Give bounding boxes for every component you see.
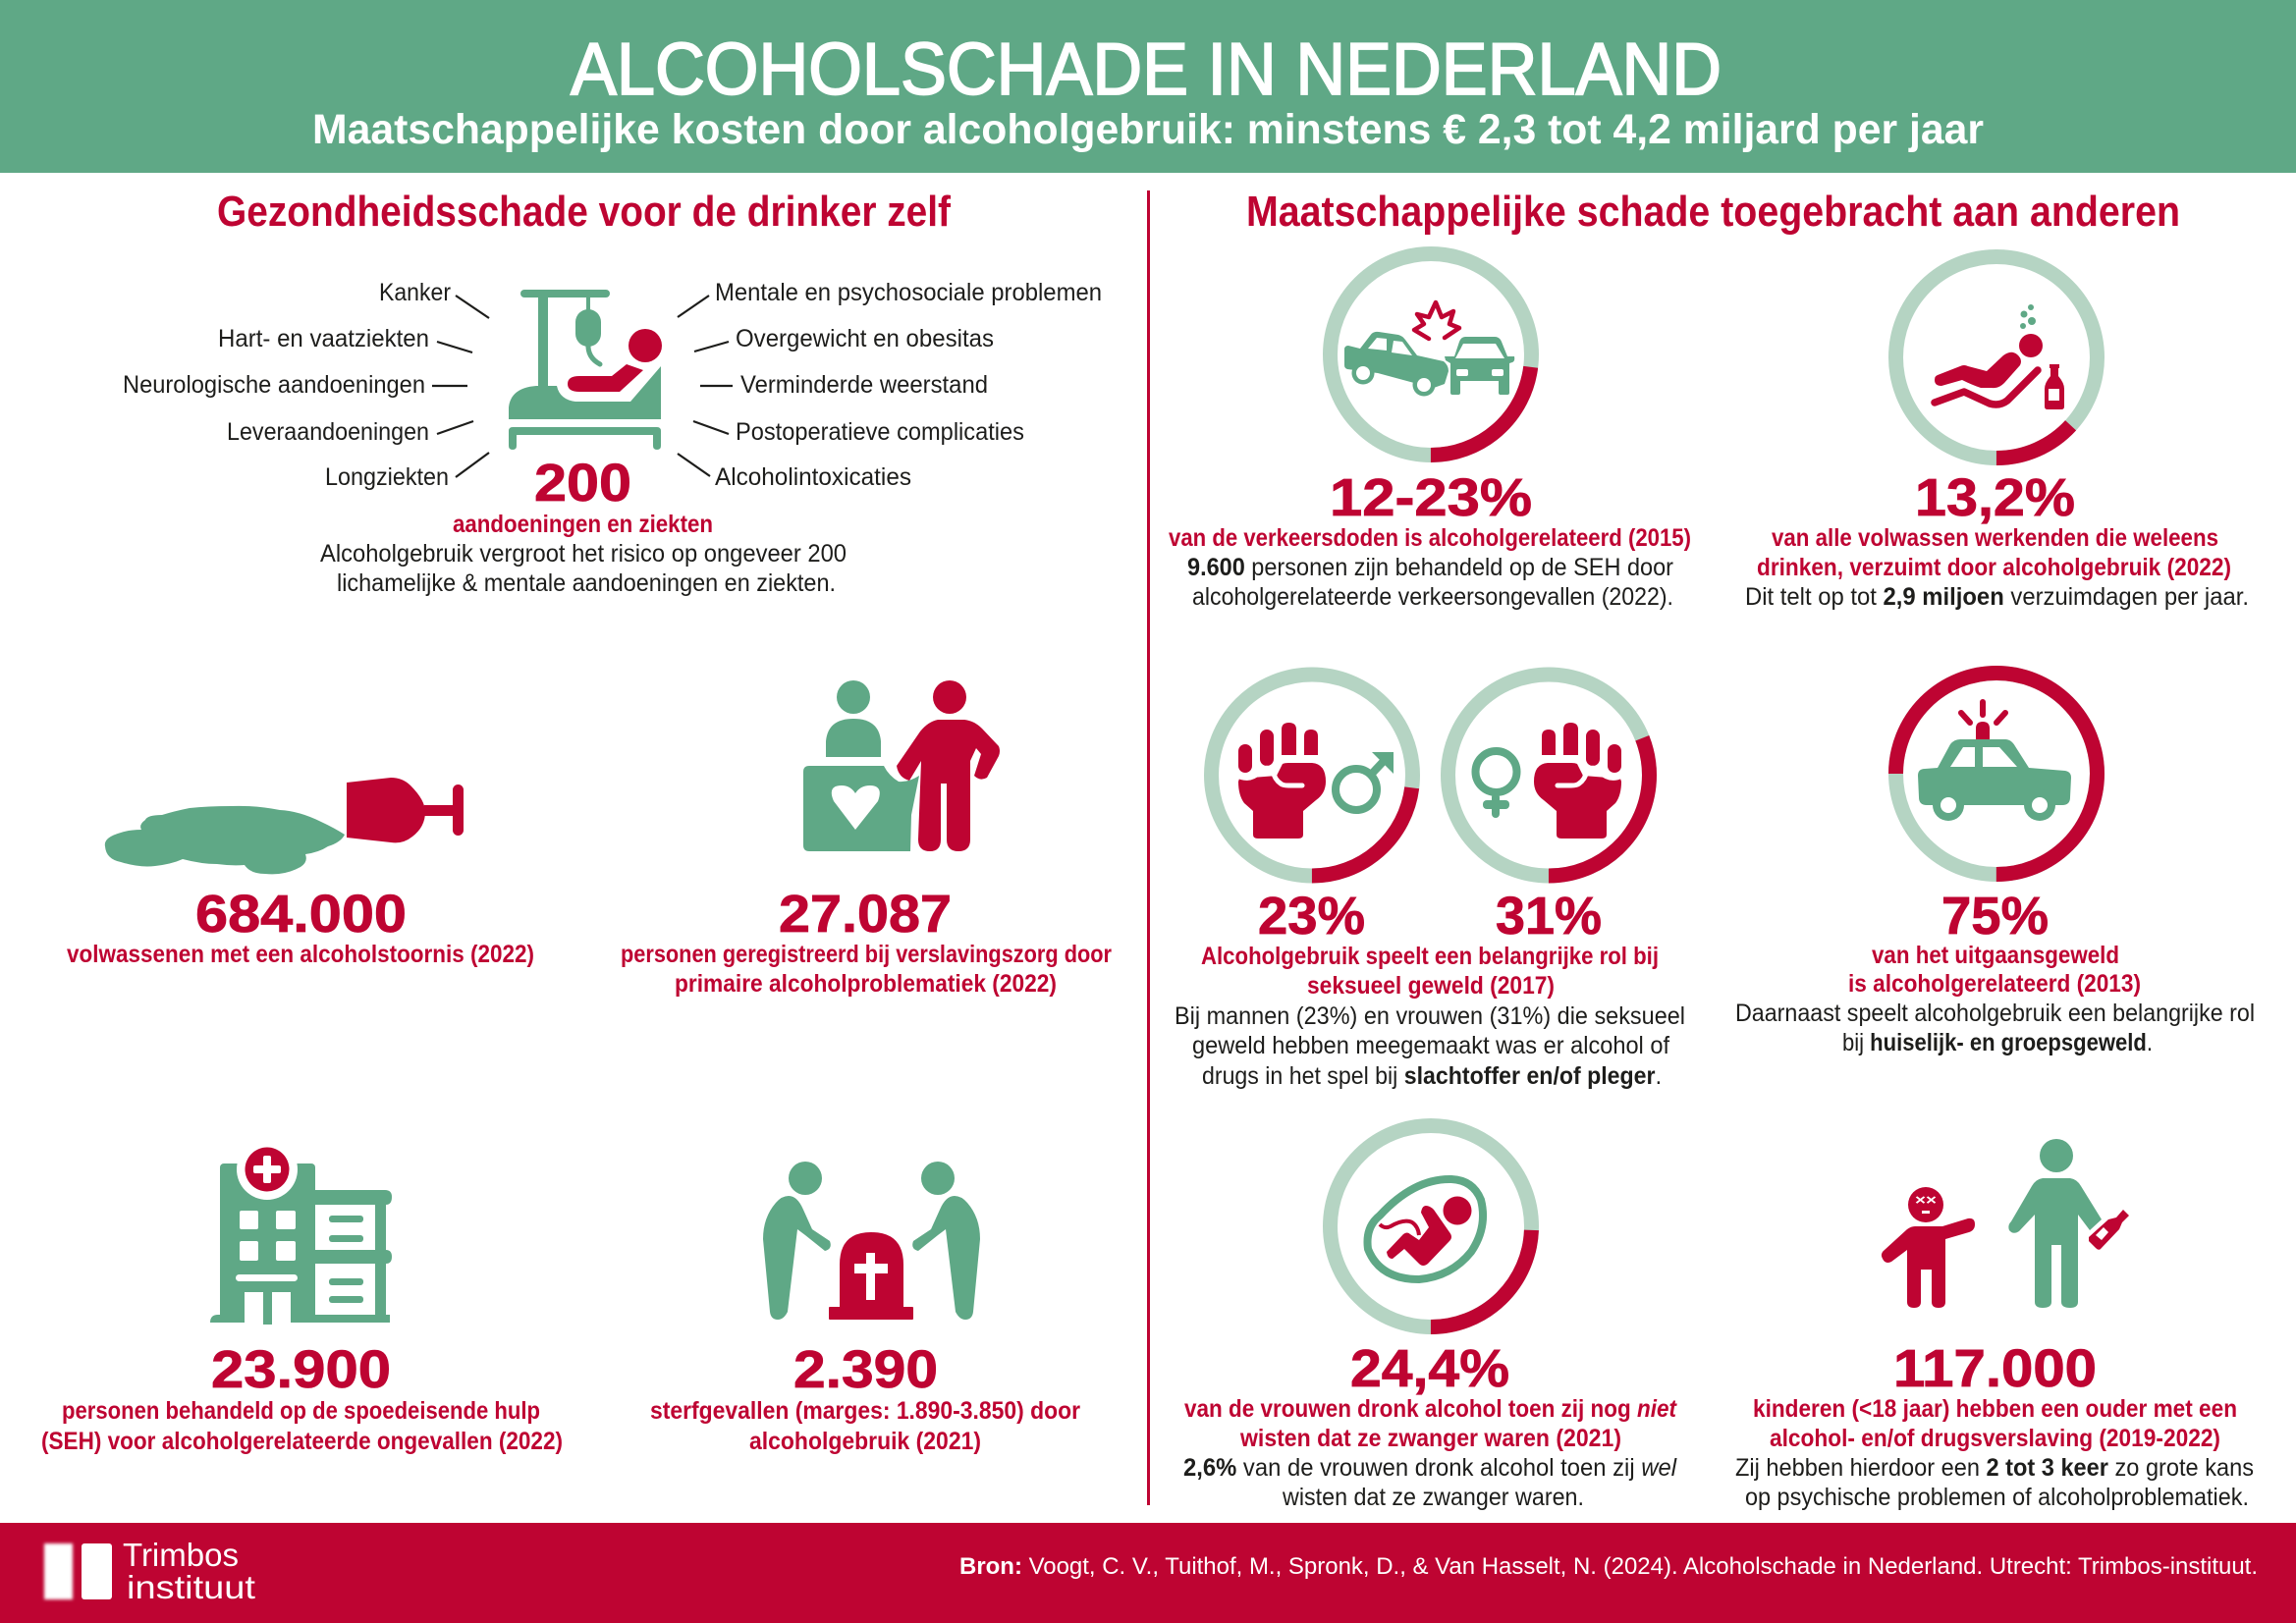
panel: 23.900 [41,1139,563,1455]
caption: personen geregistreerd bij verslavingszorg door [621,941,1112,968]
subtitle: Maatschappelijke kosten door alcoholgebruik: minstens € 2,3 tot 4,2 miljard per jaar [312,106,1984,153]
number: 27.087 [779,885,952,944]
caption [650,1397,1080,1455]
number: 24,4% [1350,1339,1509,1398]
condition labels right: Verminderde weerstand [740,371,988,399]
body text: 9.600 personen zijn behandeld op de SEH door [1187,554,1673,581]
condition labels left: Neurologische aandoeningen [123,371,425,399]
condition labels right [715,279,1102,491]
title: ALCOHOLSCHADE IN NEDERLAND [571,27,1722,110]
panel: absenteeism [1745,215,2249,611]
icon: hospital bed [509,290,662,450]
heading: societal damage: Maatschappelijke schade toegebracht aan anderen [1246,188,2180,236]
description: lichamelijke & mentale aandoeningen en ziekten. [337,569,836,597]
number: 23%: 23% [1258,887,1365,946]
red caption: aandoeningen en ziekten [453,511,713,538]
body text: 2,6% van de vrouwen dronk alcohol toen zij wel [1183,1454,1677,1482]
body text: op psychische problemen of alcoholproblematiek. [1745,1484,2249,1511]
icon: reclining drunk person with bottle [1935,304,2064,409]
body text: geweld hebben meegemaakt was er alcohol of [1192,1032,1669,1059]
panel: nightlife violence [1735,674,2255,1056]
logo: Trimbos instituut: Trimbos [123,1537,239,1573]
panel: traffic deaths [1169,242,1691,611]
number: 31%: 31% [1496,887,1602,946]
logo: Trimbos instituut [44,1537,255,1605]
icon: hospital [210,1139,392,1325]
caption: alcoholgebruik (2021) [749,1428,981,1455]
number: 12-23% [1330,468,1532,527]
panel: 200 conditions [123,279,1102,597]
body text: wisten dat ze zwanger waren. [1282,1484,1584,1511]
icon: child and parent with bottle [1882,1139,2129,1308]
caption: is alcoholgerelateerd (2013) [1848,970,2141,998]
caption [41,1397,563,1455]
number: 75% [1941,887,2049,946]
number: 117.000 [1893,1339,2097,1398]
body text [1735,1000,2255,1056]
description: Alcoholgebruik vergroot het risico op ongeveer 200 [320,540,847,568]
caption: van alle volwassen werkenden die weleens [1772,524,2218,552]
panel: sexual violence [1175,644,1685,1090]
condition labels right: Overgewicht en obesitas [736,325,994,352]
caption: kinderen (<18 jaar) hebben een ouder met een [1753,1395,2237,1423]
footer band [0,1523,2296,1623]
panel: 2.390 [650,1162,1080,1455]
condition labels left: Longziekten [325,463,449,491]
icon: female fist [1475,723,1624,839]
ring chart 24.4% [1327,1122,1535,1330]
body text [1187,554,1673,611]
icon: car crash [1344,302,1514,397]
caption [1757,524,2231,581]
caption: primaire alcoholproblematiek (2022) [675,970,1057,998]
caption: van het uitgaansgeweld [1872,942,2119,969]
body text [1183,1454,1677,1511]
number: 200: 200 [534,454,631,513]
caption: personen behandeld op de spoedeisende hulp [62,1397,540,1425]
caption [1201,943,1659,1000]
body text: Daarnaast speelt alcoholgebruik een belangrijke rol [1735,1000,2255,1027]
ring chart 75% [1895,674,2098,874]
description [320,540,847,597]
panel: children [1735,1139,2254,1511]
ring chart 13.2% [1854,215,2139,500]
caption [621,941,1112,998]
heading: health damage: Gezondheidsschade voor de drinker zelf [217,188,951,236]
panel: 27.087 [621,680,1112,998]
panel: 684.000 [67,778,534,968]
number: 23.900 [211,1340,391,1399]
condition labels left: Leveraandoeningen [227,418,429,446]
logo: Trimbos instituut: instituut [127,1569,255,1605]
body text [1735,1454,2254,1511]
ring chart men 23% [1199,663,1425,888]
caption [1184,1395,1677,1452]
body text [1175,1002,1685,1090]
number: 13,2% [1915,468,2075,527]
caption: van de verkeersdoden is alcoholgerelateerd (2015) [1169,524,1691,552]
icon: mourners at grave [763,1162,980,1320]
ring chart women 31% [1418,644,1679,906]
caption: seksueel geweld (2017) [1307,972,1555,1000]
icon: male fist [1235,723,1394,839]
ring chart 23% [1318,242,1544,467]
icon: spilled wine glass [105,778,464,874]
caption [1848,942,2141,998]
condition labels right: Postoperatieve complicaties [736,418,1024,446]
source: Bron: Voogt, C. V., Tuithof, M., Spronk, D., & Van Hasselt, N. (2024). Alcoholschade in Nederland. Utrecht: Trimbos-instituut. [959,1553,2258,1580]
condition labels right: Mentale en psychosociale problemen [715,279,1102,306]
caption: alcohol- en/of drugsverslaving (2019-2022) [1770,1425,2220,1452]
caption: sterfgevallen (marges: 1.890-3.850) door [650,1397,1080,1425]
condition labels left: Kanker [379,279,451,306]
condition labels left [123,279,451,491]
number: 2.390 [793,1340,938,1399]
icon: addiction care desk [803,680,1000,851]
caption: volwassenen met een alcoholstoornis (2022) [67,941,534,968]
caption: wisten dat ze zwanger waren (2021) [1239,1425,1621,1452]
caption: van de vrouwen dronk alcohol toen zij nog niet [1184,1395,1677,1423]
icon: child and parent with bottle: ×× [1915,1192,1937,1209]
panel: pregnancy [1183,1122,1677,1511]
condition labels left: Hart- en vaatziekten [218,325,429,352]
icon: police car [1918,702,2071,821]
icon: fetus [1367,1179,1483,1279]
body text: Dit telt op tot 2,9 miljoen verzuimdagen per jaar. [1745,583,2249,611]
condition labels right: Alcoholintoxicaties [715,463,911,491]
body text: bij huiselijk- en groepsgeweld. [1842,1029,2153,1056]
caption: Alcoholgebruik speelt een belangrijke rol bij [1201,943,1659,970]
header band [0,0,2296,173]
caption: drinken, verzuimt door alcoholgebruik (2022) [1757,554,2231,581]
caption [1753,1395,2237,1452]
body text: drugs in het spel bij slachtoffer en/of pleger. [1202,1062,1662,1090]
body text: Bij mannen (23%) en vrouwen (31%) die seksueel [1175,1002,1685,1030]
caption: (SEH) voor alcoholgerelateerde ongevallen (2022) [41,1428,563,1455]
number: 684.000 [195,885,407,944]
body text: Zij hebben hierdoor een 2 tot 3 keer zo grote kans [1735,1454,2254,1482]
body text: alcoholgerelateerde verkeersongevallen (2022). [1192,583,1673,611]
